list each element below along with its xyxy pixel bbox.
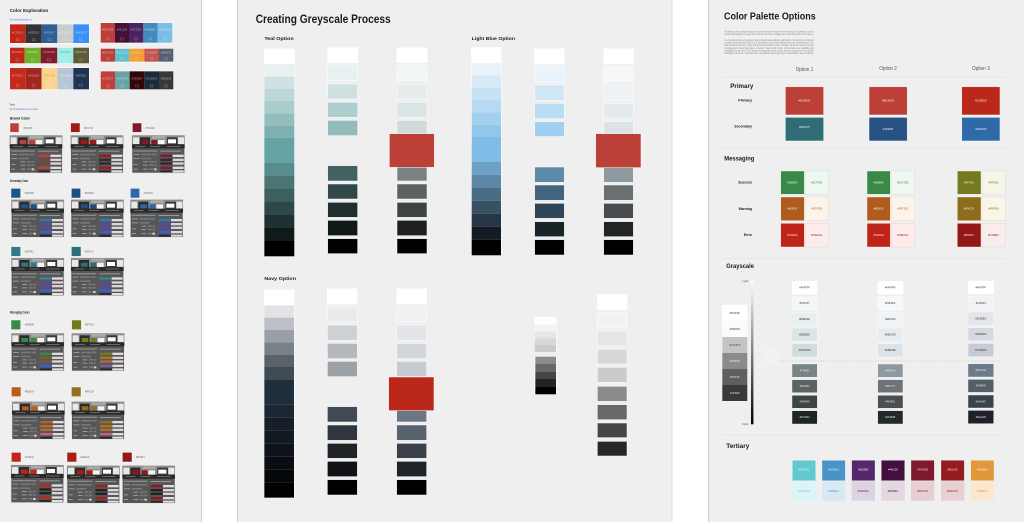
section: messaging: Messaging — [724, 156, 754, 162]
section: messaging: #F5F5E8 — [988, 181, 999, 184]
palette strip 6: #33060A — [132, 76, 143, 80]
section: messaging colors: #A81E16 — [80, 456, 90, 459]
intro text block: It's important that our products meet all web accessibility standards, including the minimum — [724, 39, 814, 42]
palette strip 3: #B7C6D6 — [60, 74, 72, 78]
grey ramp: option 1: #DBE5E5 — [799, 334, 811, 336]
intro text block: used sparingly to keep the content center stage and not distract end users. — [724, 33, 814, 36]
palette strip 4: #BD3F39 — [102, 27, 114, 31]
section: secondary color: #1E5488 — [25, 193, 34, 195]
link: exploration source: http://www.palettable.io — [10, 18, 32, 22]
grey ramp: option 3: #1E2228 — [976, 416, 986, 419]
intro text block: readability for all users. The chosen messaging colors ensure they are passing on text of light — [724, 49, 814, 52]
section: secondary color — [10, 179, 183, 296]
section: messaging: Success — [738, 180, 752, 184]
palette strip 5: #BD3F39 — [102, 51, 114, 55]
section: messaging: #8F6C1F — [964, 208, 975, 211]
ramp: teal neutralised with red test block — [389, 48, 434, 254]
tertiary swatches: strong row: #E0983A — [977, 468, 988, 472]
palette strip 3: #C4291C — [12, 74, 23, 78]
section: messaging: #C2261A — [787, 234, 798, 237]
section: primary: Primary — [738, 98, 752, 102]
palette strip 5: #C4554F — [146, 51, 158, 55]
section: messaging colors: #3B8B4A — [25, 324, 34, 327]
column headers: options: Option 3 — [972, 66, 990, 72]
tertiary swatches: strong row: #55296E — [858, 468, 869, 472]
grey ramp: option 1: #E8EFEF — [799, 318, 810, 321]
tools label and link — [9, 104, 38, 111]
grey ramp: option 2: #FFFFFF — [885, 287, 896, 290]
section: messaging: #FBECEC — [897, 234, 909, 237]
tertiary swatches: tint row: #D9E9F4 — [828, 490, 839, 493]
section: primary: #C22B1B — [975, 98, 987, 102]
section: messaging colors: #C2261A — [25, 456, 34, 459]
grey ramp: option 2: #6D7377 — [885, 385, 896, 388]
heading: creating greyscale process: Creating Greyscale Process — [256, 14, 391, 26]
palette strip 2: #C2261A — [12, 50, 23, 54]
section: secondary color: #3B7F8C — [25, 251, 34, 253]
palette strip 2: #6FB02D — [27, 50, 38, 54]
grey ramp: option 3: #E3E5EA — [975, 318, 987, 321]
group: light blue option — [471, 36, 641, 256]
palette strips: right group — [100, 22, 174, 90]
section: messaging: #C2261A — [873, 234, 884, 237]
section: brand color: Brand Color — [10, 117, 31, 121]
section: brand color: #9F1710 — [84, 128, 94, 130]
section: primary: Secondary — [734, 125, 752, 129]
palette strip 5 — [100, 48, 174, 62]
base grey stack: #8B8B8B — [730, 360, 740, 363]
palette strip 5: #566070 — [161, 51, 172, 55]
section: primary: #BC3D3D — [799, 98, 810, 102]
palette strip 6: #1A2B3A — [146, 76, 158, 80]
palette strip 4 — [100, 22, 173, 43]
intro text block: background as well as the opposite giving them flexibility and clarity. — [724, 52, 814, 55]
grey ramp: option 3: #C6CBD3 — [975, 349, 987, 352]
section: messaging: #FBECEC — [811, 234, 823, 237]
ramp: teal full — [264, 48, 295, 257]
grey ramp: option 1: #F3F7F7 — [800, 302, 810, 305]
section: primary: #BC3D3D — [882, 98, 894, 102]
label: light blue option: Light Blue Option — [472, 36, 515, 41]
grey ramp: option 3: #545E69 — [976, 385, 986, 388]
palette strip 4: #431236 — [117, 27, 128, 31]
section: messaging: #3B8B4A — [873, 181, 884, 184]
palette strip 2: #7F1D2E — [43, 50, 55, 54]
tertiary swatches: strong row: #64C9D1 — [799, 468, 810, 472]
section: messaging: #F8F5E8 — [988, 208, 999, 211]
palette strip 5: #F59E33 — [131, 51, 143, 55]
palette strip 1 — [9, 24, 90, 44]
panel: color exploration — [0, 0, 202, 522]
heading: color palette options: Color Palette Options — [724, 12, 816, 22]
palette strip 3: #FBD48D — [43, 74, 55, 78]
section: messaging: Warning — [739, 207, 752, 211]
intro text block: high contrast primary colors will be used in place of the primary colors for users who are — [724, 44, 814, 47]
palette strip 1: #333333 — [28, 30, 39, 34]
palette strip 1: #2F5F97 — [44, 30, 55, 34]
section: grayscale: Grayscale — [726, 263, 754, 270]
heading: color exploration: Color Exploration — [10, 8, 48, 14]
ramp: large grey — [597, 295, 627, 456]
section: primary: #2F6AA8 — [975, 127, 987, 131]
panel: color palette options — [708, 0, 1024, 522]
grey ramp: option 1: #5A6362 — [800, 385, 810, 388]
section: grayscale — [722, 263, 1003, 426]
scale bar: light to dark — [742, 279, 753, 426]
palette strip 4: #4C2260 — [131, 27, 142, 31]
tertiary swatches: tint row: #E3D8E1 — [888, 490, 899, 493]
palette strip 6 — [100, 71, 174, 90]
section: messaging: #ECF7EE — [897, 181, 909, 184]
ramp: teal selected — [328, 48, 358, 254]
tertiary swatches: strong row: #7F1A2D — [917, 468, 928, 472]
column headers: options: Option 1 — [796, 67, 813, 73]
section: messaging — [724, 156, 1005, 247]
panel: creating greyscale process — [237, 0, 672, 522]
ramp: navy selected — [327, 289, 357, 495]
grey ramp: option 2 — [878, 281, 903, 424]
section: messaging colors — [10, 310, 175, 503]
label: navy option: Navy Option — [264, 276, 296, 281]
base grey stack: #F8F8F8 — [730, 328, 740, 331]
grey ramp: option 1: #3E4545 — [800, 401, 810, 404]
tools label and link: http://draganddrop-site.fyi/contrast — [9, 108, 38, 111]
palette strip 2: #5D5C38 — [75, 50, 87, 54]
section: messaging colors: #B0601F — [25, 391, 35, 393]
column headers: options: Option 2 — [879, 66, 897, 72]
section: secondary color: #1F5283 — [85, 193, 94, 195]
ramp: compact grey — [534, 317, 557, 395]
palette strip 4: #438BBF — [145, 27, 156, 31]
tertiary swatches: tint row: #E6CFD4 — [917, 490, 929, 493]
section: messaging: #B0601F — [874, 208, 884, 211]
section: secondary color: #2F6AA8 — [144, 192, 153, 195]
section: messaging: #ECF7EE — [811, 181, 823, 184]
base grey stack — [722, 305, 748, 401]
section: secondary color: #2F6C75 — [85, 251, 94, 253]
label: teal option: Teal Option — [264, 36, 294, 41]
section: messaging colors: #6F7A20 — [85, 324, 95, 327]
tertiary swatches: tint row: #DCF4F6 — [799, 490, 810, 493]
tertiary swatches: strong row: #931C20 — [948, 468, 958, 472]
grey ramp: option 3: #D5D9DF — [975, 333, 987, 336]
grey ramp: option 1: #CFDDDD — [799, 349, 811, 352]
section: messaging colors: #8F181C — [136, 457, 145, 459]
grey ramp: option 2: #8F9AA0 — [885, 370, 896, 372]
grey ramp: option 3: #6D7A8A — [975, 369, 986, 372]
scale bar: light to dark: Light — [742, 279, 749, 283]
section: tertiary: Tertiary — [726, 443, 749, 450]
ramp: light blue full — [471, 47, 502, 256]
ramp: light blue neutralised with red test block — [596, 49, 641, 255]
grey ramp: option 2: #23282B — [885, 416, 896, 419]
base grey stack: #FFFFFF — [730, 312, 741, 315]
palette strip 2 — [9, 47, 90, 64]
section: primary: Primary — [730, 83, 753, 90]
intro text block: All themes use a range of greys to create a modern visual for the interface. In general, color is — [724, 31, 815, 34]
grey ramp: option 2: #EFF3F5 — [885, 318, 896, 321]
column headers: options — [796, 66, 990, 73]
section: brand color: #BC3D3D — [23, 128, 33, 130]
section: messaging colors: Messaging Colors — [10, 310, 30, 314]
tertiary swatches: tint row: #F9E8CF — [977, 490, 988, 493]
palette strip 1: #C2261A — [12, 30, 23, 34]
palette strip 5: #5EC1CC — [116, 51, 128, 55]
grey ramp: option 3: #F1F2F4 — [976, 302, 986, 305]
base grey stack: #C5C5C5 — [729, 344, 741, 347]
palette strip 2: #9FEEE8 — [60, 50, 72, 54]
section: messaging: #8F181C — [964, 234, 974, 237]
section: messaging: #FDF3E9 — [811, 208, 823, 211]
intro text block: considered to have low vision or better. Paired with them, it also improves usability and — [724, 47, 814, 50]
section: primary: #2F6C75 — [799, 125, 810, 129]
palette strip 6: #383838 — [161, 76, 172, 80]
grey ramp: option 3 — [968, 281, 994, 424]
base grey stack: #5F5F5F — [730, 376, 740, 379]
section: messaging: #F7EBEC — [988, 234, 999, 237]
tertiary swatches: strong row — [792, 460, 994, 481]
intro text block: contrast ratios that the WCAG 2.0 specifies for text and background color combinations. The — [724, 42, 814, 45]
tertiary swatches: tint row — [792, 481, 994, 501]
group: neutral greys — [534, 295, 627, 456]
group: navy option — [264, 276, 434, 498]
section: brand color — [10, 117, 185, 173]
palette strip 3: #203552 — [76, 74, 87, 78]
ramp: navy neutralised with red test block — [389, 289, 434, 495]
palette strip 1: #CCCCCC — [59, 30, 72, 34]
scale bar: light to dark: Dark — [742, 422, 749, 426]
tertiary swatches: tint row: #DDD2E1 — [858, 490, 870, 493]
tertiary swatches: strong row: #4A94C6 — [828, 468, 839, 472]
intro text block — [724, 31, 815, 55]
tertiary swatches: strong row: #44103E — [888, 468, 898, 472]
ramp: navy full — [264, 289, 295, 498]
section: messaging: #FDF3E9 — [897, 208, 909, 211]
ramp: light blue selected — [535, 49, 564, 255]
group: teal option — [264, 36, 434, 257]
grey ramp: option 1: #FFFFFF — [799, 287, 810, 290]
section: messaging colors: #8F6C1F — [85, 391, 95, 393]
section: messaging: #B0601F — [787, 208, 798, 211]
section: tertiary — [726, 443, 994, 501]
grey ramp: option 3: #3A424C — [976, 400, 986, 403]
grey ramp: option 2: #494E51 — [885, 401, 896, 404]
section: primary — [730, 83, 1000, 141]
palette strip 1: #3A91F5 — [76, 30, 87, 34]
section: messaging: #3B8B4A — [787, 181, 798, 184]
grey ramp: option 2: #E6ECF0 — [885, 334, 896, 336]
grey ramp: option 2: #F6F8FA — [885, 302, 896, 305]
palette strip 3: #A12620 — [28, 74, 40, 78]
section: messaging: #6F7A20 — [964, 181, 975, 184]
tertiary swatches: tint row: #E8CFD1 — [947, 490, 959, 493]
section: messaging: Error — [744, 233, 753, 237]
palette strip 6: #68A4A4 — [117, 76, 128, 80]
grey ramp: option 3: #FFFFFF — [976, 286, 987, 289]
section: primary: #1F5283 — [883, 127, 894, 131]
grey ramp: option 1: #1F2524 — [800, 416, 810, 419]
grey ramp: option 1 — [792, 281, 817, 424]
base grey stack: #393939 — [730, 392, 740, 395]
palette strip 6: #C13F37 — [102, 76, 114, 80]
palette strip 4: #79BDE8 — [159, 27, 171, 31]
section: brand color: #7F1A2D — [146, 127, 155, 130]
tools label and link: Tools — [9, 104, 16, 106]
section: secondary color: Secondary Color — [10, 179, 29, 183]
palette strips: left group — [9, 24, 90, 90]
grey ramp: option 2: #DBE3E9 — [885, 349, 896, 352]
palette strip 3 — [9, 67, 90, 90]
grey ramp: option 1: #778483 — [800, 370, 810, 372]
